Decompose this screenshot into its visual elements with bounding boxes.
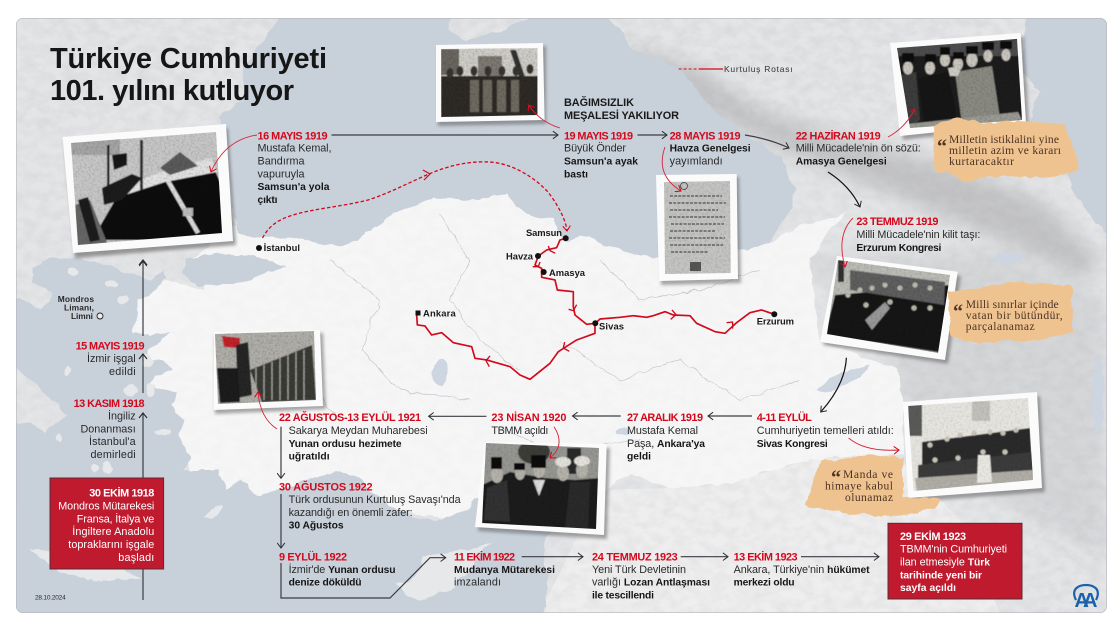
map route: land journey (417, 238, 774, 379)
red box: 30 Ekim 1918: İngiltere Anadolu (72, 525, 154, 538)
map route arrow mid (423, 170, 430, 180)
event: 23 Temmuz 1919: Milli Mücadele'nin kilit taşı: (856, 229, 980, 241)
quote paper: Milli sınırlar: “ (953, 301, 963, 323)
event: 4-11 Eylül: Sivas Kongresi (757, 439, 828, 450)
event: 13 Kasım 1918: İngiliz (108, 410, 136, 422)
event: 23 Nisan 1920 (491, 411, 566, 437)
photo: TBMM opening (475, 440, 610, 539)
event: 15 Mayıs 1919: edildi (109, 366, 136, 378)
legend: Kurtuluş Rotası (679, 64, 793, 74)
map label: Mondros: Limni (71, 311, 93, 321)
event: 28 Mayıs 1919 (670, 130, 751, 168)
photo: Sakarya soldiers (214, 330, 326, 414)
map labels: İstanbul (264, 242, 300, 253)
date stamp: 28.10.2024 (35, 594, 66, 602)
event: 22 Ağustos-13 Eylül 1921 (279, 411, 428, 462)
quote paper: Manda ve himaye: Manda ve (843, 468, 893, 481)
heading: Bağımsızlık: BAĞIMSIZLIK (564, 96, 634, 109)
arrow: to 4-11 Eylül (821, 358, 846, 412)
arrow: to 27 Aralık (708, 415, 752, 417)
legend: Kurtuluş Rotası: Kurtuluş Rotası (724, 64, 793, 74)
event: 19 Mayıs 1919 (564, 130, 638, 180)
event: 23 Nisan 1920: TBMM açıldı (491, 425, 548, 437)
quote paper: Milletin istiklalini: “ (937, 136, 947, 158)
event: 11 Ekim 1922: imzalandı (454, 576, 501, 588)
event: 4-11 Eylül: 4-11 EYLÜL (757, 411, 812, 424)
event: 24 Temmuz 1923 (592, 552, 710, 602)
event: 19 Mayıs 1919: bastı (564, 170, 588, 180)
heading: Bağımsızlık: MEŞALESİ YAKILIYOR (564, 109, 679, 122)
quote paper: Milletin istiklalini: milletin azim ve kararı (949, 144, 1061, 157)
title: 101. yılını kutluyor (50, 75, 294, 107)
event: 11 Ekim 1922 (454, 550, 555, 588)
map labels: Sivas (599, 320, 624, 332)
event: 30 Ağustos 1922: 30 AĞUSTOS 1922 (279, 480, 373, 494)
event: 11 Ekim 1922: Mudanya Mütarekesi (454, 565, 555, 576)
event: 22 Haziran 1919: Milli Mücadele'nin ön sözü: (796, 142, 921, 154)
event: 27 Aralık 1919: 27 ARALIK 1919 (627, 412, 703, 424)
event: 16 Mayıs 1919: Mustafa Kemal, (258, 142, 332, 154)
arrow: to 13 Ekim (681, 556, 728, 558)
event: 15 Mayıs 1919: 15 MAYIS 1919 (76, 340, 145, 352)
red box: 30 Ekim 1918: Fransa, İtalya ve (77, 512, 154, 525)
photo: Erzurum congress (820, 255, 961, 364)
event: 30 Ağustos 1922 (279, 480, 461, 532)
title (50, 43, 327, 107)
event: 15 Mayıs 1919 (76, 340, 145, 378)
event: 23 Temmuz 1919 (856, 216, 980, 254)
event: 9 Eylül 1922: denize döküldü (289, 578, 362, 588)
map route: sea voyage dashed (262, 162, 567, 238)
arrow: to 22 Haziran (745, 135, 789, 148)
quote paper: Milli sınırlar: parçalanamaz (966, 320, 1035, 333)
arrow: to 22 Ağustos (429, 415, 486, 417)
quote paper: Manda ve himaye: himaye kabul (825, 480, 893, 492)
heading: Bağımsızlık (564, 96, 679, 122)
event: 4-11 Eylül: Cumhuriyetin temelleri atıldı: (757, 425, 894, 437)
islands (30, 268, 493, 600)
arrow: to 23 Nisan (572, 415, 621, 417)
red box: 30 Ekim 1918 (50, 478, 164, 569)
title: Türkiye Cumhuriyeti (50, 43, 327, 75)
red box: 30 Ekim 1918: Mondros Mütarekesi (58, 500, 154, 512)
event: 13 Kasım 1918 (74, 398, 145, 461)
map labels: Amasya (549, 267, 586, 278)
map label: Mondros: Limanı, (64, 302, 94, 312)
event: 22 Haziran 1919: Amasya Genelgesi (796, 156, 887, 168)
timeline axis (142, 261, 144, 600)
event: 19 Mayıs 1919: Samsun'a ayak (564, 156, 638, 168)
sea: Caspian (1023, 12, 1115, 240)
event: 23 Temmuz 1919: 23 TEMMUZ 1919 (856, 216, 938, 228)
red box: 29 Ekim 1923: sayfa açıldı (900, 583, 956, 594)
event: 27 Aralık 1919: Paşa, Ankara'ya (627, 438, 705, 450)
quote paper: Milli sınırlar: Milli sınırlar içinde (966, 298, 1059, 311)
left timeline (139, 260, 147, 600)
event: 27 Aralık 1919 (627, 412, 705, 462)
event: 30 Ağustos 1922: Türk ordusunun Kurtuluş Savaşı'nda (289, 494, 461, 506)
event: 30 Ağustos 1922: kazandığı en önemli zafer: (289, 507, 413, 519)
lakes (433, 253, 1103, 435)
event: 16 Mayıs 1919: Samsun'a yola (258, 182, 330, 193)
red box: 29 Ekim 1923: TBMM'nin Cumhuriyeti (900, 544, 1007, 556)
event: 9 Eylül 1922: İzmir'de Yunan ordusu (289, 563, 396, 576)
event: 13 Kasım 1918: Donanması (80, 424, 136, 436)
quote paper: Manda ve himaye: olunamaz (845, 491, 893, 504)
red box: 30 Ekim 1918: 30 EKİM 1918 (89, 486, 154, 500)
event: 22 Ağustos-13 Eylül 1921: uğratıldı (289, 452, 330, 462)
event: 22 Ağustos-13 Eylül 1921: Yunan ordusu hezimete (289, 439, 402, 450)
event: 16 Mayıs 1919: 16 MAYIS 1919 (258, 130, 328, 142)
event: 9 Eylül 1922 (279, 550, 396, 588)
arrow: to 30 Ağustos (280, 427, 282, 478)
arrow: to 11 Ekim (281, 558, 446, 598)
photo: Havza document (656, 174, 741, 285)
arrow: to 19 Mayıs (332, 134, 558, 136)
photo: Sivas congress (903, 392, 1045, 502)
event: 19 Mayıs 1919: Büyük Önder (564, 142, 626, 154)
photo: Amasya group (890, 33, 1029, 140)
red photo pointers (211, 105, 915, 458)
event: 15 Mayıs 1919: İzmir işgal (87, 352, 136, 365)
map labels: Havza (506, 250, 534, 262)
quote paper: Milletin istiklalini: Milletin istiklalini yine (949, 133, 1059, 146)
map labels: Erzurum (757, 316, 794, 326)
event: 30 Ağustos 1922: 30 Ağustos (289, 520, 344, 532)
event: 28 Mayıs 1919: 28 MAYIS 1919 (670, 130, 741, 142)
photo: Bandırma ship (60, 124, 236, 258)
red box: 29 Ekim 1923: ilan etmesiyle Türk (900, 556, 990, 568)
event: 13 Ekim 1923 (734, 550, 870, 588)
arrow: to 29 Ekim (801, 556, 879, 558)
event: 24 Temmuz 1923: varlığı Lozan Antlaşması (592, 576, 710, 588)
map label: Mondros (58, 294, 103, 321)
red box: 29 Ekim 1923: 29 EKİM 1923 (900, 530, 966, 543)
arrow: to 24 Temmuz (522, 556, 583, 558)
event: 16 Mayıs 1919 (258, 130, 332, 206)
event: 28 Mayıs 1919: yayımlandı (670, 156, 723, 168)
map labels (256, 227, 794, 332)
map labels: Ankara (423, 308, 456, 318)
event: 22 Haziran 1919: 22 HAZİRAN 1919 (796, 130, 881, 142)
event: 13 Kasım 1918: demirledi (90, 449, 136, 461)
quote paper: Milli sınırlar (949, 283, 1073, 343)
event: 23 Nisan 1920: 23 NİSAN 1920 (491, 411, 566, 424)
event: 16 Mayıs 1919: vapuruyla (258, 168, 304, 180)
red box: 29 Ekim 1923 (888, 523, 1022, 599)
event: 24 Temmuz 1923: 24 TEMMUZ 1923 (592, 552, 678, 564)
red box: 29 Ekim 1923: tarihinde yeni bir (900, 570, 982, 582)
quote paper: Milletin istiklalini: kurtaracaktır (949, 155, 1014, 168)
event: 27 Aralık 1919: Mustafa Kemal (627, 425, 698, 437)
arrow: to 9 Eylül (280, 494, 282, 548)
quote paper: Manda ve himaye (806, 455, 938, 517)
timeline arrows (139, 260, 147, 418)
event: 28 Mayıs 1919: Havza Genelgesi (670, 144, 751, 154)
event: 16 Mayıs 1919: çıktı (258, 195, 278, 206)
event: 13 Ekim 1923: 13 EKİM 1923 (734, 550, 798, 564)
event: 13 Kasım 1918: İstanbul'a (89, 435, 136, 448)
photo: Samsun group (436, 43, 546, 126)
sea: Marmara (182, 253, 286, 287)
event: 22 Ağustos-13 Eylül 1921: 22 AĞUSTOS-13 EYLÜL 1921 (279, 411, 421, 424)
event: 24 Temmuz 1923: ile tescillendi (592, 590, 654, 602)
quote paper: Milli sınırlar: vatan bir bütündür, (966, 309, 1063, 322)
map labels: Samsun (526, 227, 562, 238)
event: 11 Ekim 1922: 11 EKİM 1922 (454, 550, 515, 564)
red box: 30 Ekim 1918: başladı (118, 552, 154, 564)
event: 19 Mayıs 1919: 19 MAYIS 1919 (564, 130, 633, 142)
event: 13 Ekim 1923: Ankara, Türkiye'nin hükümet (734, 564, 870, 576)
quote paper: Manda ve himaye: “ (831, 467, 841, 489)
arrow: to 23 Temmuz (828, 172, 860, 207)
icon: AA logo: AA (1074, 590, 1098, 612)
event: 27 Aralık 1919: geldi (627, 452, 651, 462)
sea: Black Sea (218, 12, 795, 258)
event: 22 Haziran 1919 (796, 130, 921, 168)
event: 16 Mayıs 1919: Bandırma (258, 156, 304, 168)
event: 24 Temmuz 1923: Yeni Türk Devletinin (592, 564, 686, 576)
event: 23 Temmuz 1919: Erzurum Kongresi (856, 243, 942, 254)
arrow: to 28 Mayıs (638, 134, 667, 136)
event: 13 Ekim 1923: merkezi oldu (734, 578, 795, 588)
event: 22 Ağustos-13 Eylül 1921: Sakarya Meydan Muharebesi (289, 425, 428, 437)
map label: Mondros: Mondros (58, 294, 94, 304)
sea: Aegean and Mediterranean (8, 257, 600, 622)
red box: 30 Ekim 1918: topraklarını işgale (68, 539, 154, 551)
event: 4-11 Eylül (757, 411, 894, 450)
event: 9 Eylül 1922: 9 EYLÜL 1922 (279, 550, 347, 564)
quote paper: Milletin istiklalini (933, 118, 1079, 182)
event: 13 Kasım 1918: 13 KASIM 1918 (74, 398, 145, 410)
